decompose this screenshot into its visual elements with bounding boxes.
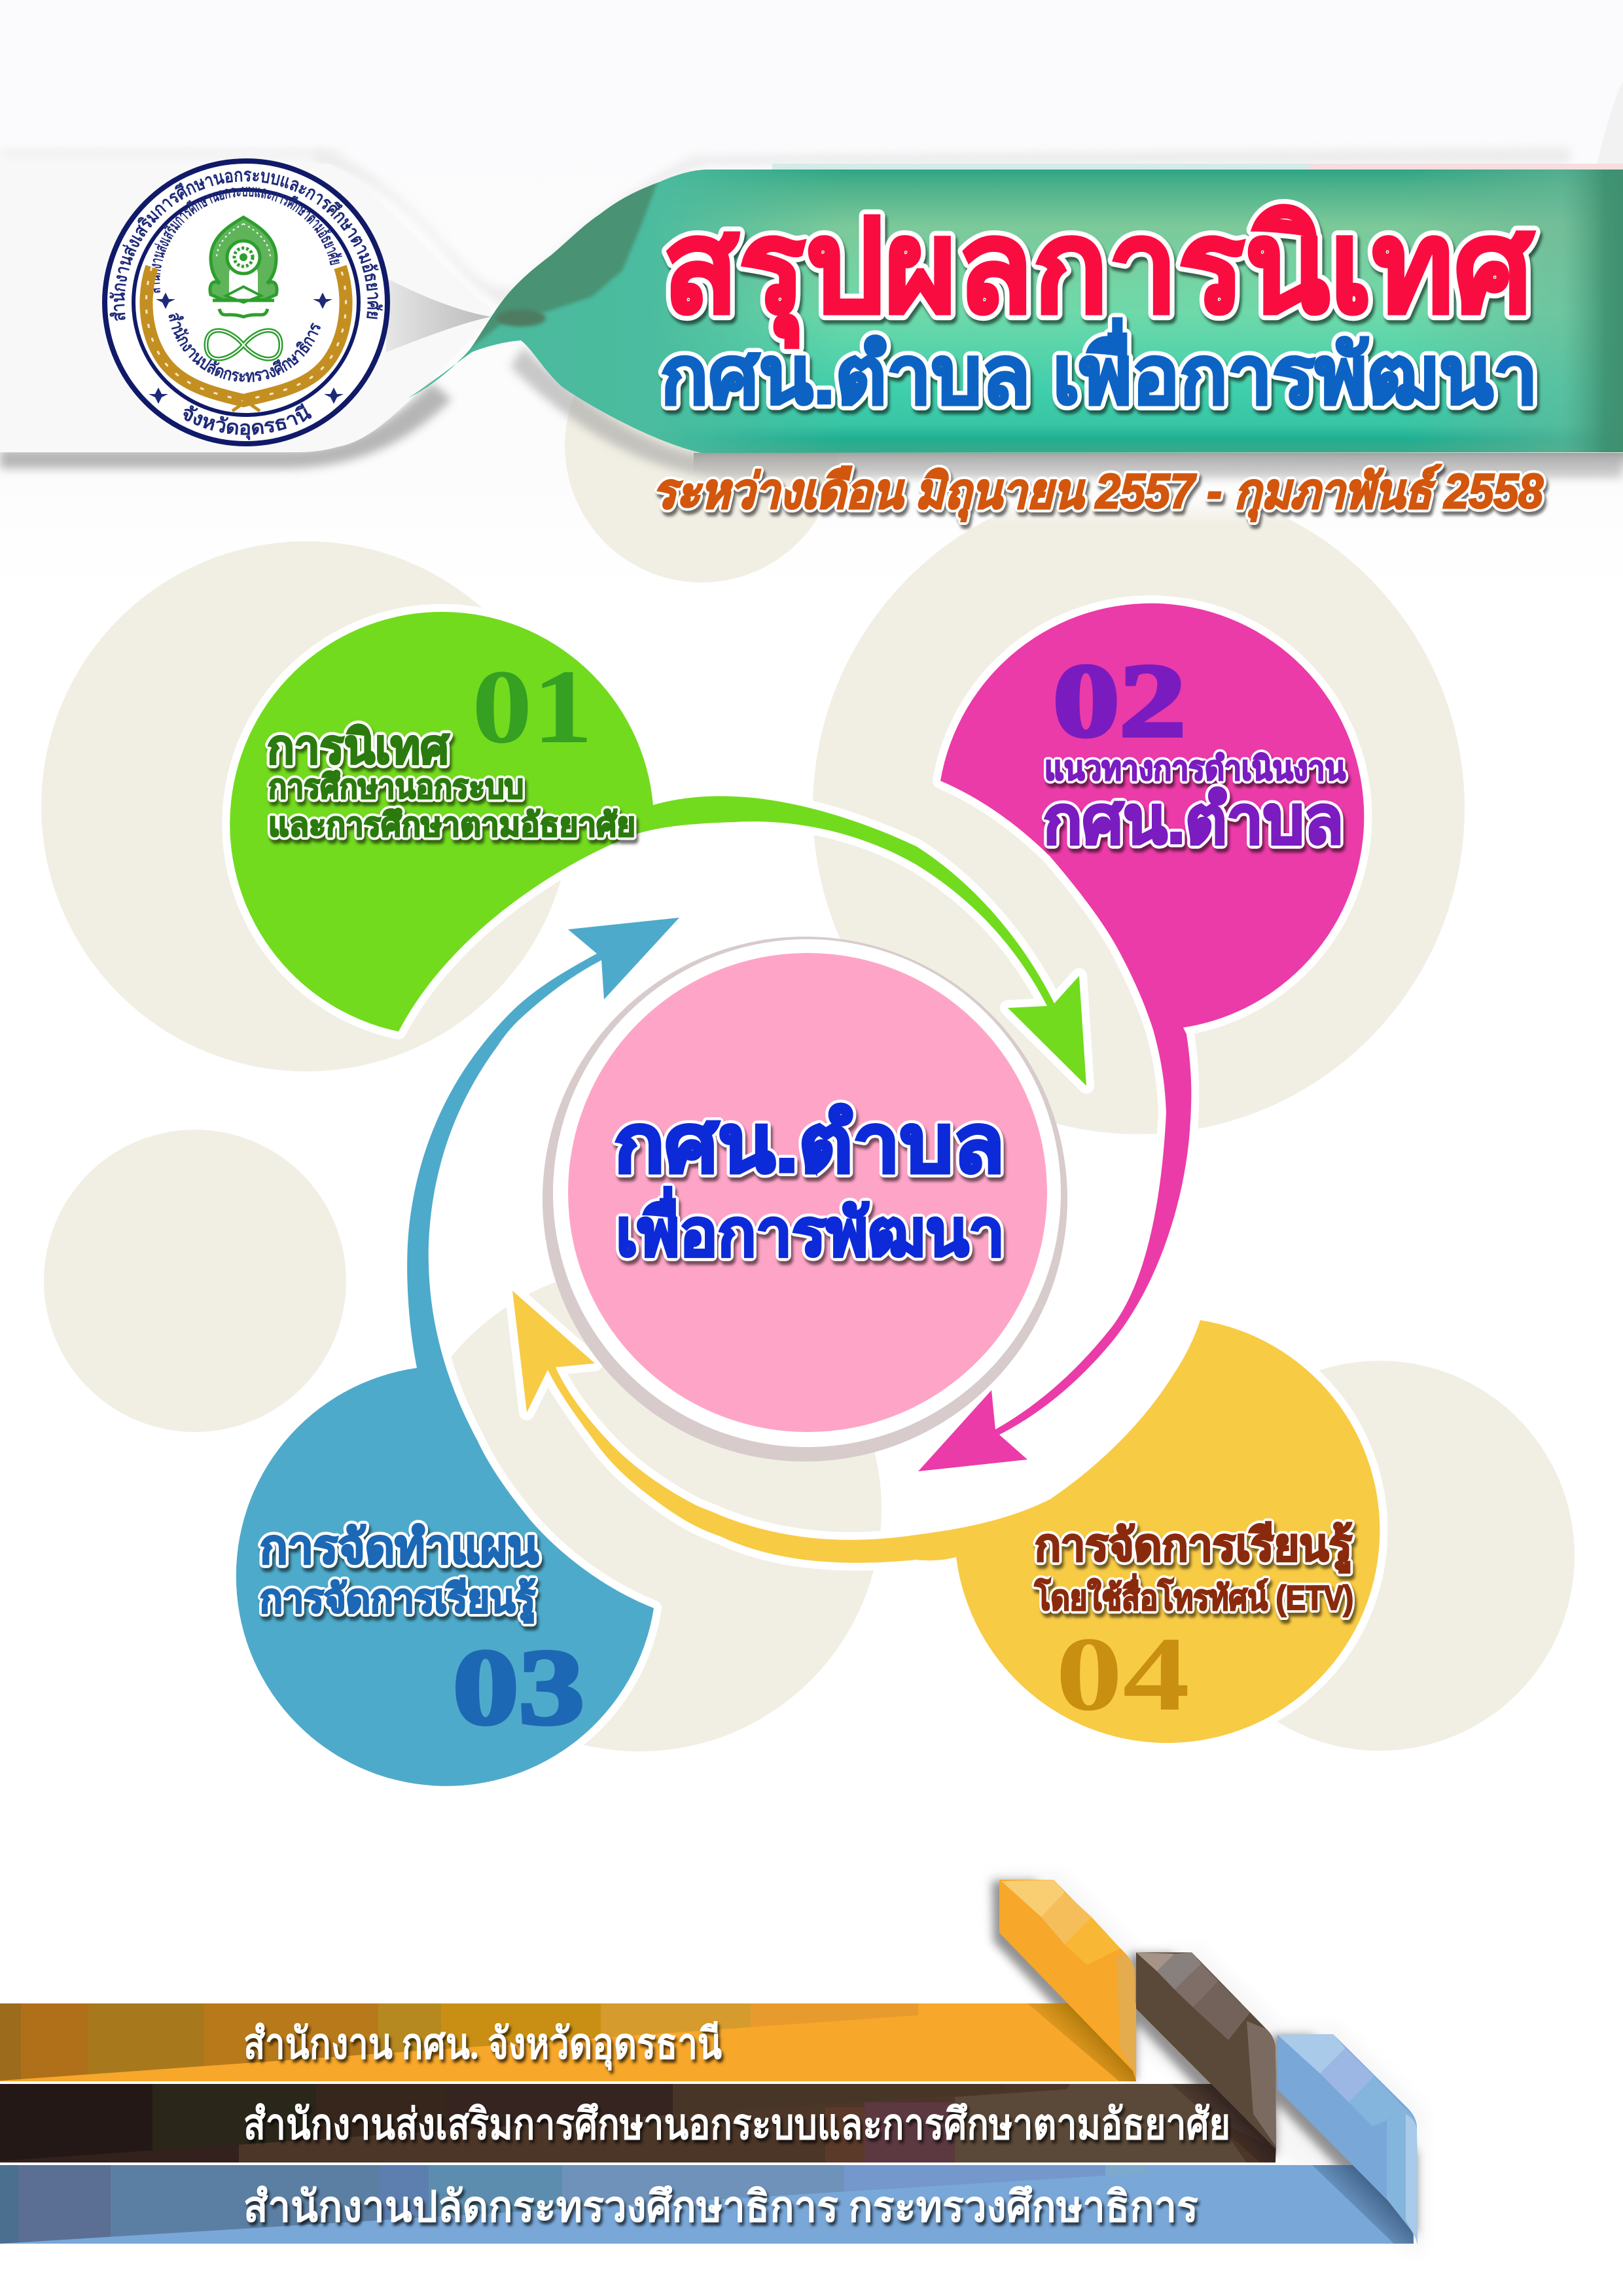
number 02: 02 bbox=[1053, 642, 1186, 759]
heading: supervision: การนิเทศ bbox=[267, 721, 450, 774]
seal outer text: สำนักงานส่งเสริมการศึกษานอกระบบและการศึกษาตามอัธยาศัย bbox=[109, 170, 383, 321]
center heading: กศน.ตำบล bbox=[614, 1099, 1005, 1189]
heading: tambon NFE: กศน.ตำบล bbox=[1043, 783, 1344, 857]
text: learning management: การจัดการเรียนรู้ bbox=[260, 1577, 535, 1623]
text: learning management: การจัดการเรียนรู้ bbox=[260, 1577, 535, 1623]
seal disc and rings bbox=[105, 161, 387, 444]
footer text: provincial office: สำนักงาน กศน. จังหวัดอุดรธานี bbox=[243, 2020, 722, 2071]
heading: planning: การจัดทำแผน bbox=[260, 1521, 539, 1573]
number 04: 04 bbox=[1056, 1616, 1190, 1733]
footer: fold shadows bbox=[992, 1881, 1417, 2235]
center heading: กศน.ตำบล bbox=[614, 1099, 1005, 1189]
yellow bubble with arrow to 03 bbox=[512, 1291, 1380, 1743]
panel: 04 learning management (yellow) bbox=[512, 1291, 1380, 1743]
title: main heading: สรุปผลการนิเทศ bbox=[663, 194, 1534, 348]
title: main heading: สรุปผลการนิเทศ bbox=[663, 194, 1534, 348]
footer text: ministry: สำนักงานปลัดกระทรวงศึกษาธิการ กระทรวงศึกษาธิการ bbox=[243, 2183, 1198, 2231]
small circle behind header bbox=[565, 309, 838, 583]
text: informal education: และการศึกษาตามอัธยาศัย bbox=[268, 806, 635, 843]
ribbon grey fold lens bbox=[386, 278, 491, 352]
footer: blue band bbox=[0, 2165, 1414, 2244]
heading: planning: การจัดทำแผน bbox=[260, 1521, 539, 1573]
green banner bbox=[408, 170, 1623, 453]
date range: ระหว่างเดือน มิถุนายน 2557 - กุมภาพันธ์ 2558 bbox=[652, 464, 1544, 522]
panel: 02 guidelines (magenta) bbox=[918, 603, 1364, 1471]
panel: 01 supervision (green) bbox=[230, 612, 1086, 1086]
title: second line: กศน.ตำบล เพื่อการพัฒนา bbox=[660, 318, 1538, 421]
center subheading: เพื่อการพัฒนา bbox=[616, 1187, 1005, 1270]
header ribbon bbox=[0, 82, 1623, 478]
background decorative circles bbox=[41, 482, 1575, 1751]
text: non-formal education: การศึกษานอกระบบ bbox=[268, 768, 524, 805]
panel: 03 planning (blue) bbox=[236, 918, 679, 1786]
center circle bbox=[543, 937, 1067, 1462]
seal inner text: สำนักงานส่งเสริมการศึกษานอกระบบและการศึกษาตามอัธยาศัย bbox=[152, 187, 343, 293]
magenta bubble with arrow to 04 bbox=[918, 603, 1364, 1471]
number 03: 03 bbox=[453, 1627, 584, 1747]
heading: learning management: การจัดการเรียนรู้ bbox=[1035, 1520, 1352, 1573]
blue bubble with arrow to 01 bbox=[236, 918, 679, 1786]
seal province text: จังหวัดอุดรธานี bbox=[183, 403, 312, 440]
text: guidelines: แนวทางการดำเนินงาน bbox=[1044, 750, 1346, 787]
date range: ระหว่างเดือน มิถุนายน 2557 - กุมภาพันธ์ 2558 bbox=[652, 464, 1544, 522]
text: guidelines: แนวทางการดำเนินงาน bbox=[1044, 750, 1346, 787]
center ring bbox=[543, 937, 1067, 1462]
footer: brown fold bbox=[1136, 1952, 1276, 2162]
footer: fold halo bbox=[990, 1872, 1425, 2251]
text: informal education: และการศึกษาตามอัธยาศัย bbox=[268, 806, 635, 843]
green bubble with arrow to 02 bbox=[230, 612, 1086, 1086]
seal stars bbox=[149, 293, 344, 404]
white left ribbon bbox=[0, 162, 492, 452]
footer ribbons bbox=[0, 1872, 1425, 2251]
text: non-formal education: การศึกษานอกระบบ bbox=[268, 768, 524, 805]
center subheading: เพื่อการพัฒนา bbox=[616, 1187, 1005, 1270]
soft fade over upper circle edge bbox=[851, 458, 1348, 524]
title: second line: กศน.ตำบล เพื่อการพัฒนา bbox=[660, 318, 1538, 421]
footer: orange band bbox=[0, 2003, 1136, 2081]
number 01: 01 bbox=[472, 649, 593, 766]
footer: dark band bbox=[0, 2084, 1275, 2162]
footer: orange fold bbox=[999, 1880, 1136, 2081]
heading: supervision: การนิเทศ bbox=[267, 721, 450, 774]
seal wreath bbox=[146, 267, 346, 411]
header soft shadow bbox=[0, 82, 1623, 478]
heading: learning management: การจัดการเรียนรู้ bbox=[1035, 1520, 1352, 1573]
text: by television: โดยใช้สื่อโทรทัศน์ (ETV) bbox=[1034, 1574, 1353, 1617]
logo seal bbox=[102, 158, 390, 446]
seal lower text: สำนักงานปลัดกระทรวงศึกษาธิการ bbox=[169, 313, 321, 382]
text: by television: โดยใช้สื่อโทรทัศน์ (ETV) bbox=[1034, 1574, 1353, 1617]
footer: blue fold bbox=[1277, 2034, 1418, 2244]
seal green emblem bbox=[206, 217, 281, 359]
heading: tambon NFE: กศน.ตำบล bbox=[1043, 783, 1344, 857]
footer text: NFE office: สำนักงานส่งเสริมการศึกษานอกระบบและการศึกษาตามอัธยาศัย bbox=[243, 2101, 1230, 2149]
page top tint bbox=[0, 0, 1623, 589]
